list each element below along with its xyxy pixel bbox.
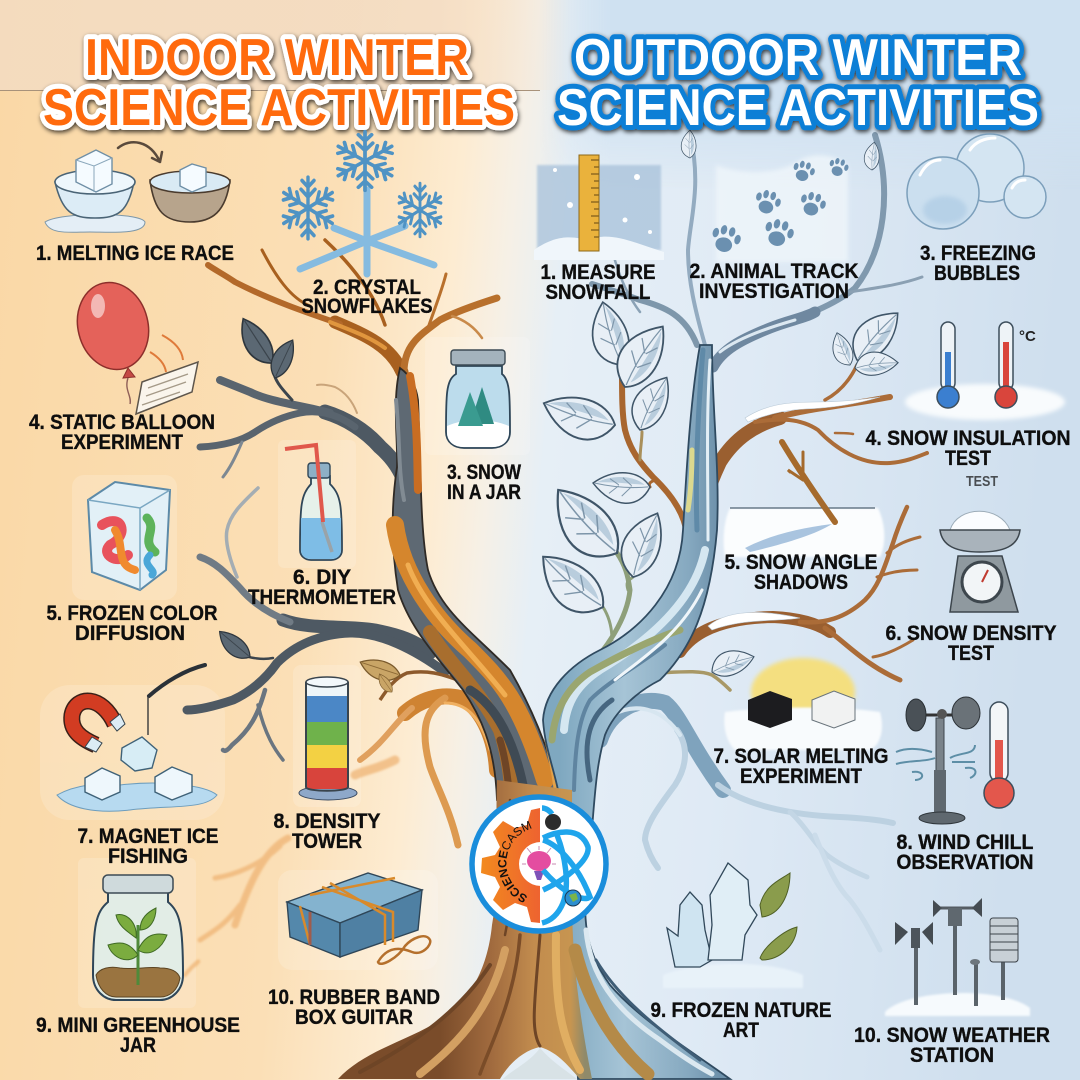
root gap [503, 1048, 577, 1079]
labels: outdoor activities [540, 242, 1070, 1067]
label: rubber band box guitar: BOX GUITAR [295, 1006, 413, 1029]
label: rubber band box guitar: 10. RUBBER BAND [268, 986, 440, 1009]
label: animal track investigation [690, 260, 858, 303]
heading: indoor: SCIENCE ACTIVITIES [43, 79, 515, 137]
label: faint duplicate test: TEST [966, 473, 998, 490]
label: frozen nature art [650, 999, 832, 1042]
heading: outdoor: SCIENCE ACTIVITIES [557, 79, 1039, 137]
label: snow in a jar: 3. SNOW [447, 461, 521, 484]
label: snow density test: TEST [948, 642, 994, 665]
label: density tower: 8. DENSITY [274, 810, 380, 833]
icon: snow angle stick [724, 442, 884, 557]
icon: frozen nature art [663, 863, 803, 988]
icon: snow density scale [940, 511, 1020, 612]
label: static balloon: EXPERIMENT [61, 431, 183, 454]
left top branches [208, 240, 497, 372]
label: freezing bubbles [920, 242, 1036, 285]
right main limb [543, 345, 730, 1079]
heading: outdoor [557, 29, 1039, 137]
label: wind chill observation [896, 831, 1034, 874]
label: snow in a jar [447, 461, 521, 504]
left roots [360, 800, 648, 1074]
label: magnet ice fishing: FISHING [108, 845, 188, 868]
lower brown branch [680, 617, 830, 652]
icon: animal track [708, 155, 850, 262]
tree [185, 130, 927, 1079]
icon: wind chill [896, 697, 1014, 824]
logo brain [522, 846, 556, 880]
icon: crystal snowflakes [280, 132, 444, 274]
heading: indoor [43, 29, 515, 137]
left limb strands [395, 376, 558, 800]
label: magnet ice fishing [78, 825, 218, 868]
label: snow weather station: 10. SNOW WEATHER [854, 1024, 1050, 1047]
label: snow insulation test: TEST [945, 447, 991, 470]
icon: melting ice race [45, 142, 230, 232]
logo text: SCIENCECASM [498, 820, 532, 902]
icon: mini greenhouse jar [93, 875, 183, 1000]
snow on branches [708, 397, 880, 630]
label: mini greenhouse jar: JAR [120, 1034, 156, 1057]
icon: solar melting [724, 658, 882, 750]
label: measure snowfall [540, 261, 656, 304]
icon: magnet ice fishing [57, 665, 217, 811]
label: snow angle shadows: SHADOWS [754, 571, 848, 594]
olive branch [590, 553, 630, 665]
label: density tower: TOWER [292, 830, 362, 853]
icon: snow insulation thermometers [905, 322, 1065, 420]
label: rubber band box guitar [268, 986, 440, 1029]
label: magnet ice fishing: 7. MAGNET ICE [78, 825, 218, 848]
logo: sciencecasm [469, 794, 609, 934]
label: static balloon [29, 411, 215, 454]
brown branch [673, 418, 780, 600]
label: static balloon: 4. STATIC BALLOON [29, 411, 215, 434]
left orange arches [360, 696, 497, 845]
label: wind chill observation: 8. WIND CHILL [896, 831, 1034, 854]
icon: frozen color diffusion [88, 482, 170, 590]
label: snow weather station [854, 1024, 1050, 1067]
left brown leaves and twig [357, 655, 470, 700]
icon: weather station [885, 898, 1030, 1016]
label: diy thermometer: 6. DIY [293, 566, 351, 589]
right limb branches [590, 135, 927, 950]
label: mini greenhouse jar: 9. MINI GREENHOUSE [36, 1014, 240, 1037]
left main limb [393, 368, 562, 800]
label: snow angle shadows [724, 551, 878, 594]
pale lower branches [600, 701, 723, 790]
left grey branches [187, 377, 445, 760]
label: frozen nature art: ART [723, 1019, 759, 1042]
label: snow angle shadows: 5. SNOW ANGLE [724, 551, 878, 574]
label: solar melting experiment [714, 745, 888, 788]
icon backdrops [40, 337, 530, 1008]
logo atom [542, 808, 590, 923]
label: wind chill observation: OBSERVATION [896, 851, 1034, 874]
label: animal track investigation: 2. ANIMAL TRACK [690, 260, 858, 283]
label: freezing bubbles: 3. FREEZING [920, 242, 1036, 265]
label: density tower [274, 810, 380, 853]
label: measure snowfall: 1. MEASURE [540, 261, 656, 284]
label: snow in a jar: IN A JAR [447, 481, 521, 504]
label: snow insulation test [866, 427, 1070, 470]
heading: indoor: INDOOR WINTER [85, 29, 469, 87]
logo moon [545, 814, 561, 830]
icon: rubber band box guitar [287, 873, 430, 964]
label: diy thermometer [248, 566, 396, 609]
label: snow density test: 6. SNOW DENSITY [886, 622, 1056, 645]
label: diy thermometer: THERMOMETER [248, 586, 396, 609]
logo gear [481, 808, 540, 923]
label: frozen nature art: 9. FROZEN NATURE [650, 999, 832, 1022]
label: crystal snowflakes: 2. CRYSTAL [313, 276, 421, 299]
trunk lower half [338, 780, 592, 1079]
label: solar melting experiment: 7. SOLAR MELTING [714, 745, 888, 768]
label: measure snowfall: SNOWFALL [546, 281, 651, 304]
label: snow density test [886, 622, 1056, 665]
icon: diy thermometer [285, 445, 342, 560]
logo earth [565, 890, 581, 906]
label: animal track investigation: INVESTIGATION [699, 280, 849, 303]
label: crystal snowflakes [302, 276, 432, 318]
icon: freezing bubbles [907, 134, 1046, 229]
leaf branch [622, 370, 687, 535]
label: mini greenhouse jar [36, 1014, 240, 1057]
icon: snow insulation thermometers: °C [1019, 328, 1036, 345]
label: melting ice race: 1. MELTING ICE RACE [36, 242, 234, 265]
labels: indoor activities [29, 242, 521, 1057]
label: freezing bubbles: BUBBLES [934, 262, 1020, 285]
label: snow weather station: STATION [910, 1044, 994, 1067]
label: solar melting experiment: EXPERIMENT [740, 765, 862, 788]
heading: outdoor: OUTDOOR WINTER [574, 29, 1022, 87]
label: frozen color diffusion: 5. FROZEN COLOR [46, 602, 218, 625]
label: crystal snowflakes: SNOWFLAKES [302, 295, 432, 318]
label: frozen color diffusion: DIFFUSION [75, 622, 185, 645]
icon: measure snowfall [534, 155, 664, 260]
icon: static balloon [68, 275, 198, 414]
icon: snow in a jar [446, 350, 510, 448]
right limb strands [552, 350, 712, 1074]
silver leaves [527, 130, 908, 681]
label: frozen color diffusion [46, 602, 218, 645]
left pale wisps [185, 760, 395, 975]
icon: density tower [299, 677, 357, 800]
